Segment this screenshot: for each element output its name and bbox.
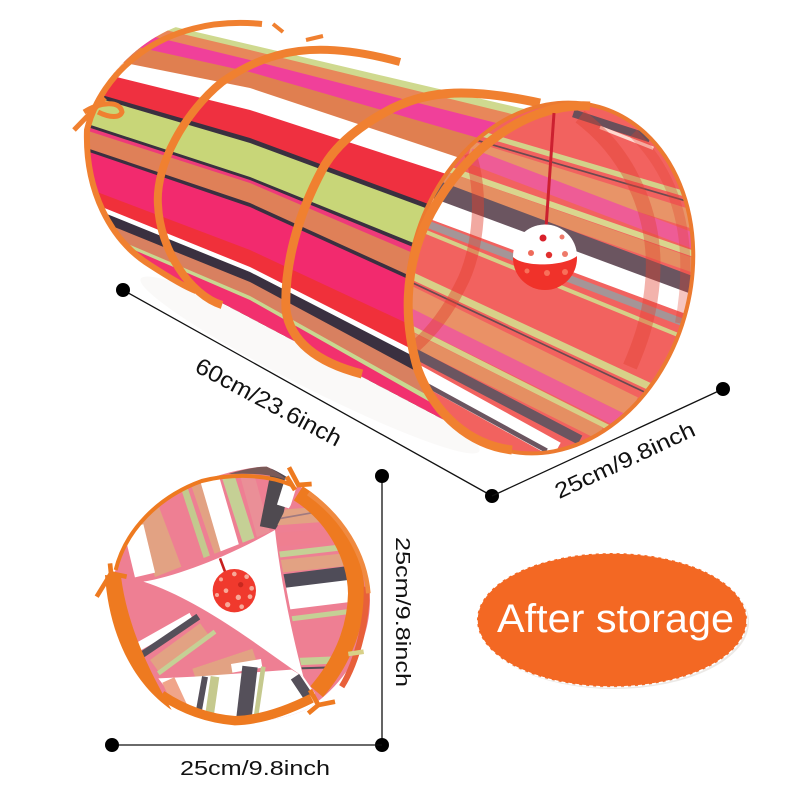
left tie bow bbox=[74, 98, 122, 130]
dimension: diameter 25cm bbox=[492, 382, 730, 504]
tunnel: extended view bbox=[72, 20, 696, 456]
hanging ball toy bbox=[513, 225, 577, 290]
lower left fabric fold bbox=[138, 617, 322, 727]
outer right strip bbox=[308, 493, 368, 687]
infographic canvas bbox=[72, 20, 749, 775]
right fabric fold bbox=[277, 508, 348, 670]
center opening bbox=[143, 530, 303, 677]
dimension: diameter 25cm: 25cm/9.8inch bbox=[551, 417, 699, 504]
small ball toy bbox=[213, 569, 256, 612]
back wire ring bbox=[87, 23, 262, 291]
dimension: length 60cm bbox=[116, 283, 499, 503]
hanging string bbox=[546, 113, 554, 228]
tie bottom right bbox=[308, 690, 335, 713]
front ring thick left side bbox=[408, 106, 590, 450]
see-through inner rings bbox=[415, 153, 478, 347]
thick left orange band bbox=[105, 575, 172, 710]
top fabric fold bbox=[133, 470, 292, 577]
dimension: folded width 25cm: 25cm/9.8inch bbox=[180, 758, 330, 780]
floor shadow bbox=[131, 259, 489, 471]
tunnel interior stripes bbox=[412, 106, 692, 452]
dimension: folded height 25cm: 25cm/9.8inch bbox=[391, 537, 413, 687]
top tie bbox=[273, 24, 323, 40]
hanging string small bbox=[220, 558, 225, 572]
tie left bbox=[97, 563, 127, 597]
third wire ring bbox=[286, 93, 540, 374]
tunnel: folded storage view bbox=[95, 460, 385, 727]
badge: after storage bbox=[477, 553, 749, 689]
fabric disc bbox=[114, 466, 370, 720]
tie top right bbox=[287, 467, 312, 490]
dimension: folded width 25cm bbox=[105, 738, 382, 780]
dimension: length 60cm: 60cm/23.6inch bbox=[191, 352, 346, 451]
top dark fold cap bbox=[228, 467, 287, 480]
front wire ring bbox=[366, 68, 734, 488]
orange outer ring bbox=[116, 476, 356, 721]
badge: after storage: After storage bbox=[497, 597, 734, 641]
tunnel outer fabric stripes bbox=[90, 27, 524, 420]
second wire ring bbox=[158, 50, 400, 305]
dimension: folded height 25cm bbox=[375, 469, 413, 752]
